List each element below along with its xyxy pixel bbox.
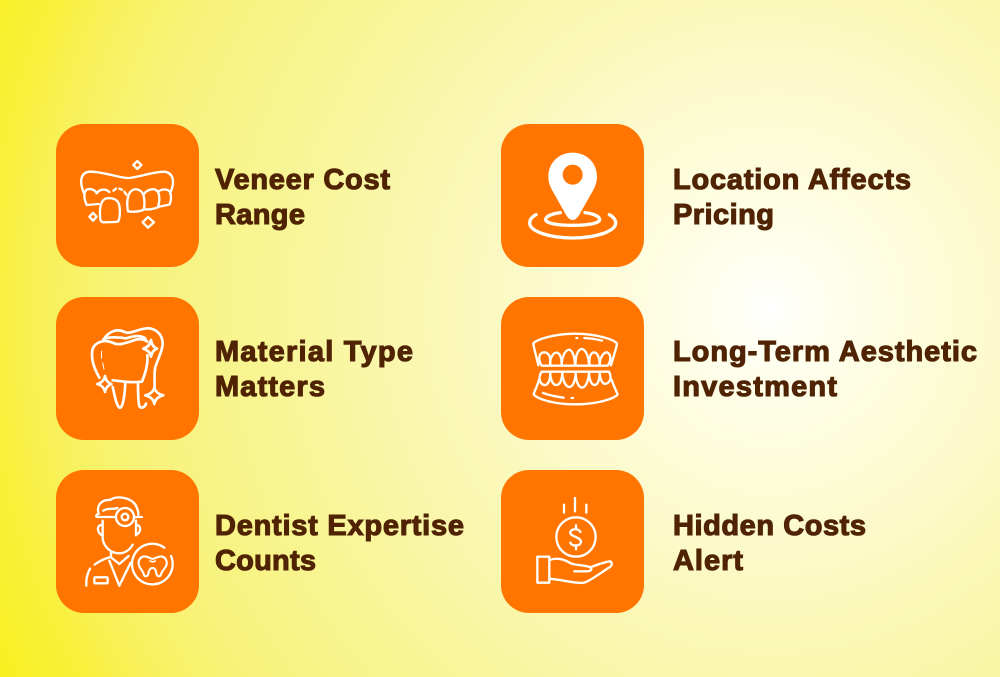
panel: material type matters xyxy=(56,297,413,440)
label: long-term aesthetic investment: Long-Term Aesthetic xyxy=(673,336,977,368)
label: hidden costs alert: Alert xyxy=(673,545,743,577)
panel: location affects pricing xyxy=(501,124,911,267)
label: dentist expertise counts: Counts xyxy=(215,545,316,577)
icon: tooth with sparkles xyxy=(56,297,199,440)
label: location affects pricing: Pricing xyxy=(673,199,774,231)
label: veneer cost range: Range xyxy=(215,199,305,231)
panel: long-term aesthetic investment xyxy=(501,297,977,440)
icon: veneer teeth xyxy=(56,124,199,267)
icon: location pin xyxy=(501,124,644,267)
panel: veneer cost range xyxy=(56,124,390,267)
label: dentist expertise counts: Dentist Expertise xyxy=(215,510,464,542)
label: location affects pricing: Location Affects xyxy=(673,164,911,196)
label: veneer cost range: Veneer Cost xyxy=(215,164,390,196)
label: hidden costs alert: Hidden Costs xyxy=(673,510,866,542)
icon: coin over open hand xyxy=(501,470,644,613)
panel: hidden costs alert xyxy=(501,470,866,613)
icon: dentist with tooth badge xyxy=(56,470,199,613)
label: material type matters: Material Type xyxy=(215,336,413,368)
panel: dentist expertise counts xyxy=(56,470,464,613)
icon: full denture xyxy=(501,297,644,440)
label: material type matters: Matters xyxy=(215,371,325,403)
label: long-term aesthetic investment: Investment xyxy=(673,371,837,403)
